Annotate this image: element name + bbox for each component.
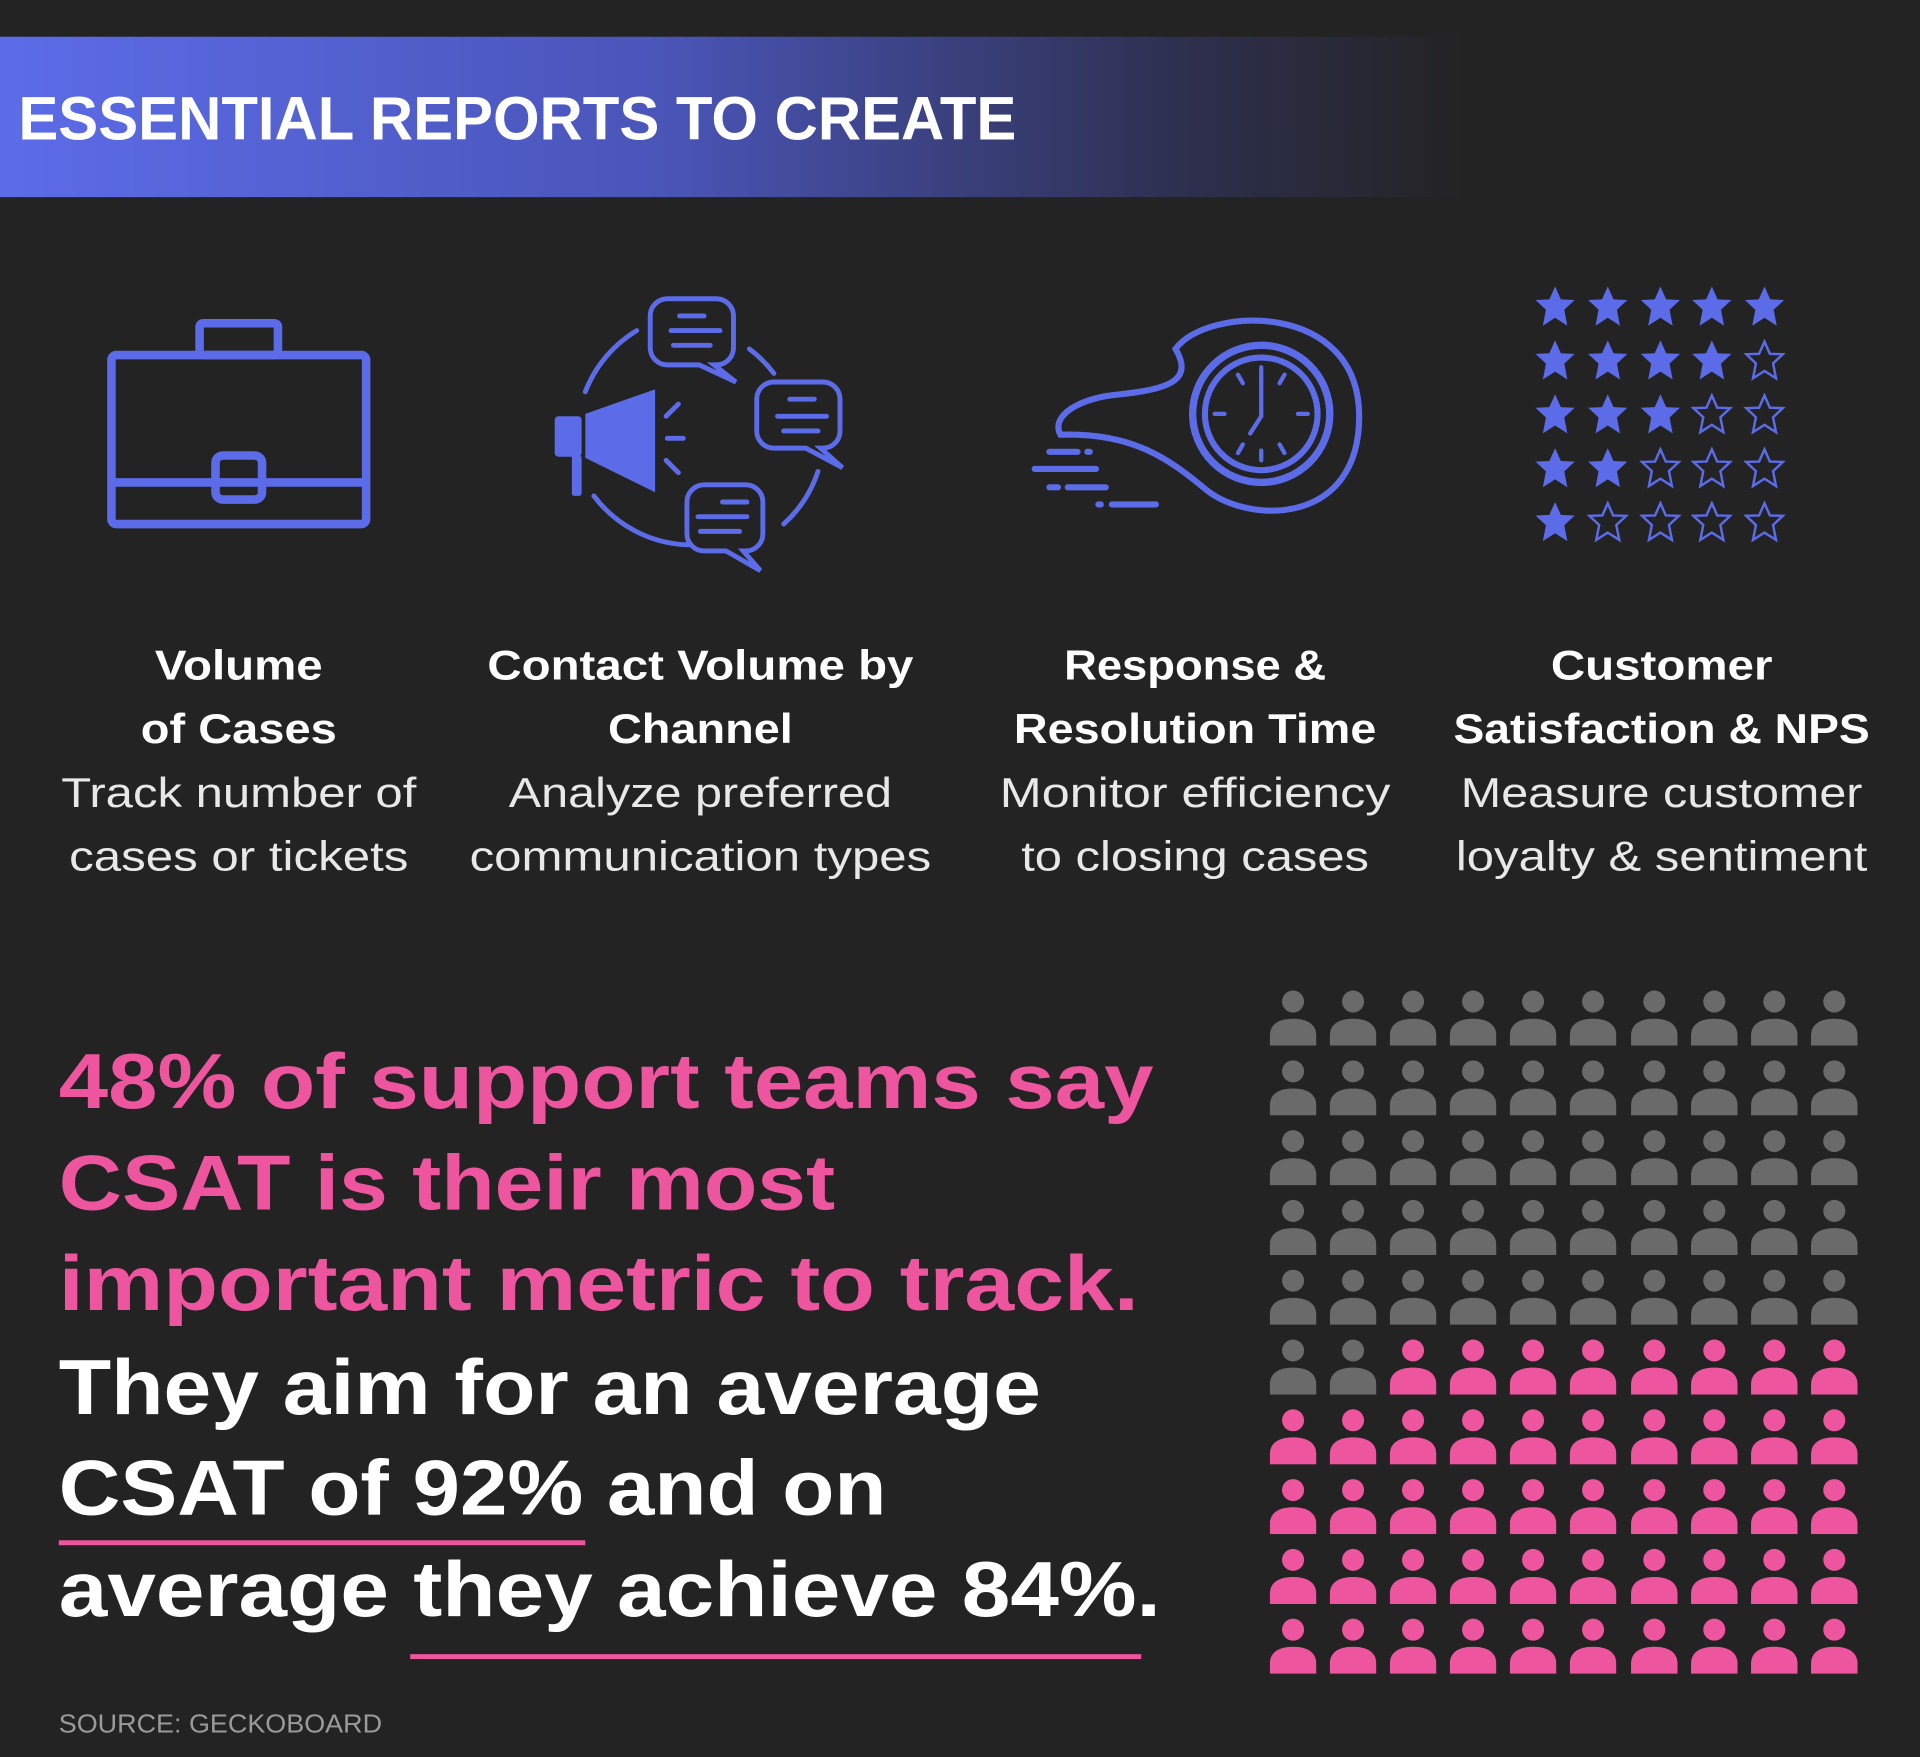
text: response & resolution time xyxy=(1000,642,1391,880)
stat statement: 48% of support teams say xyxy=(59,1037,1154,1125)
icon: megaphone with chat bubbles xyxy=(555,299,842,571)
text: response & resolution time: to closing cases xyxy=(1021,833,1369,880)
icon: briefcase xyxy=(111,323,366,524)
stat statement xyxy=(59,1037,1161,1659)
text: customer satisfaction & NPS: Measure customer xyxy=(1461,769,1863,816)
text: volume of cases xyxy=(61,642,417,880)
icon: star ratings xyxy=(1536,287,1784,541)
icon: clock with speed swoosh xyxy=(1035,321,1359,511)
text: volume of cases: of Cases xyxy=(141,705,337,752)
stat statement: important metric to track. xyxy=(59,1239,1139,1327)
text: customer satisfaction & NPS: loyalty & sentiment xyxy=(1456,833,1868,880)
stat statement: average they achieve 84%. xyxy=(59,1545,1161,1633)
text: customer satisfaction & NPS: Customer xyxy=(1551,642,1772,689)
header banner xyxy=(0,37,1469,197)
source: SOURCE: GECKOBOARD xyxy=(59,1711,382,1739)
text: volume of cases: Track number of xyxy=(61,769,417,816)
text: contact volume by channel xyxy=(470,642,931,880)
people grid: 48 of 100 xyxy=(1270,991,1858,1674)
text: response & resolution time: Resolution Time xyxy=(1014,705,1376,752)
text: contact volume by channel: Contact Volume by xyxy=(487,642,913,689)
header banner: ESSENTIAL REPORTS TO CREATE xyxy=(18,85,1016,153)
stat statement: They aim for an average xyxy=(59,1343,1041,1431)
text: customer satisfaction & NPS xyxy=(1453,642,1870,880)
text: volume of cases: cases or tickets xyxy=(69,833,408,880)
text: contact volume by channel: Analyze preferred xyxy=(509,769,892,816)
text: volume of cases: Volume xyxy=(155,642,323,689)
stat statement: CSAT is their most xyxy=(59,1139,835,1227)
text: response & resolution time: Monitor efficiency xyxy=(1000,769,1391,816)
text: contact volume by channel: Channel xyxy=(608,705,793,752)
stat statement: CSAT of 92% and on xyxy=(59,1444,887,1532)
text: contact volume by channel: communication types xyxy=(470,833,931,880)
text: customer satisfaction & NPS: Satisfaction & NPS xyxy=(1453,705,1870,752)
text: response & resolution time: Response & xyxy=(1064,642,1326,689)
